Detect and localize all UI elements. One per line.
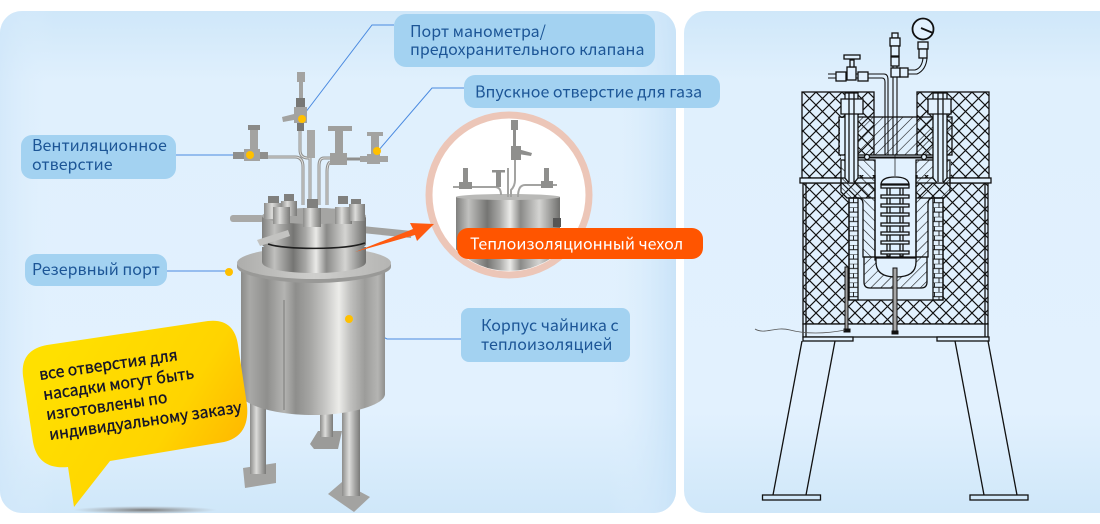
panel: reactor photo with labels bbox=[0, 11, 676, 513]
label: vent bbox=[21, 132, 176, 179]
safety fitting bbox=[890, 33, 908, 77]
bolts bbox=[264, 194, 365, 227]
label: gauge port: предохранительного клапана bbox=[410, 36, 644, 60]
attachment dots bbox=[225, 115, 381, 323]
callout: custom nozzles bbox=[23, 321, 247, 507]
pressure gauge bbox=[912, 18, 934, 58]
brick lining bbox=[849, 198, 943, 300]
side rods bbox=[230, 215, 412, 238]
label: gauge port: Порт манометра/ bbox=[410, 18, 547, 42]
inset circle: insulation jacket bbox=[429, 115, 589, 277]
valve bbox=[836, 55, 868, 81]
rear leg bbox=[310, 405, 342, 449]
label: insulation jacket bbox=[457, 228, 703, 259]
weld seam bbox=[283, 300, 285, 410]
callout: custom nozzles: индивидуальному заказу bbox=[47, 395, 243, 445]
drawing: reactor section bbox=[755, 18, 1028, 500]
pipe highlights bbox=[268, 128, 330, 205]
seal line bbox=[845, 156, 947, 158]
stirrer coil bbox=[881, 155, 909, 256]
pipes bbox=[268, 128, 361, 205]
left leg bbox=[243, 390, 276, 488]
insulation blocks bbox=[800, 92, 991, 337]
tank brim bbox=[237, 247, 391, 283]
label: gauge port bbox=[394, 14, 655, 67]
vessel walls bbox=[841, 155, 951, 288]
label: gas inlet bbox=[464, 75, 720, 108]
label: kettle body bbox=[461, 308, 630, 362]
orange arrow bbox=[355, 223, 434, 252]
vent valve bbox=[233, 125, 268, 161]
head block bbox=[839, 117, 952, 155]
label: kettle body: Корпус чайника с bbox=[481, 312, 619, 336]
tubing bbox=[828, 33, 927, 155]
label: vent: отверстие bbox=[32, 151, 113, 175]
tank body bbox=[241, 266, 385, 415]
label: spare port: Резервный порт bbox=[32, 256, 160, 280]
panel: technical cross-section drawing bbox=[684, 11, 1100, 513]
callout: custom nozzles: изготовлены по bbox=[44, 385, 169, 425]
label: insulation jacket: Теплоизоляционный чехол bbox=[470, 230, 683, 254]
callout: custom nozzles: насадки могут быть bbox=[41, 360, 195, 405]
bolts bbox=[841, 93, 951, 183]
label: spare port bbox=[25, 254, 167, 286]
legs bbox=[762, 341, 1028, 500]
leader lines bbox=[167, 25, 464, 339]
label: vent: Вентиляционное bbox=[32, 132, 167, 156]
thermowells bbox=[844, 267, 898, 334]
base plates bbox=[803, 337, 989, 341]
middle port bbox=[307, 130, 315, 158]
right leg bbox=[328, 400, 370, 512]
fittings bbox=[233, 72, 388, 165]
front left rod bbox=[257, 230, 290, 246]
flange stack bbox=[262, 208, 366, 273]
thermocouple wire bbox=[755, 329, 845, 333]
callout shadow bbox=[73, 506, 217, 514]
gas inlet valve bbox=[360, 132, 388, 164]
reactor photo bbox=[230, 72, 412, 512]
label: kettle body: теплоизоляцией bbox=[481, 331, 613, 355]
callout: custom nozzles: все отверстия для bbox=[37, 342, 179, 385]
needle valve bbox=[328, 126, 352, 165]
gauge port bbox=[282, 72, 307, 131]
label: gas inlet: Впускное отверстие для газа bbox=[475, 78, 702, 102]
